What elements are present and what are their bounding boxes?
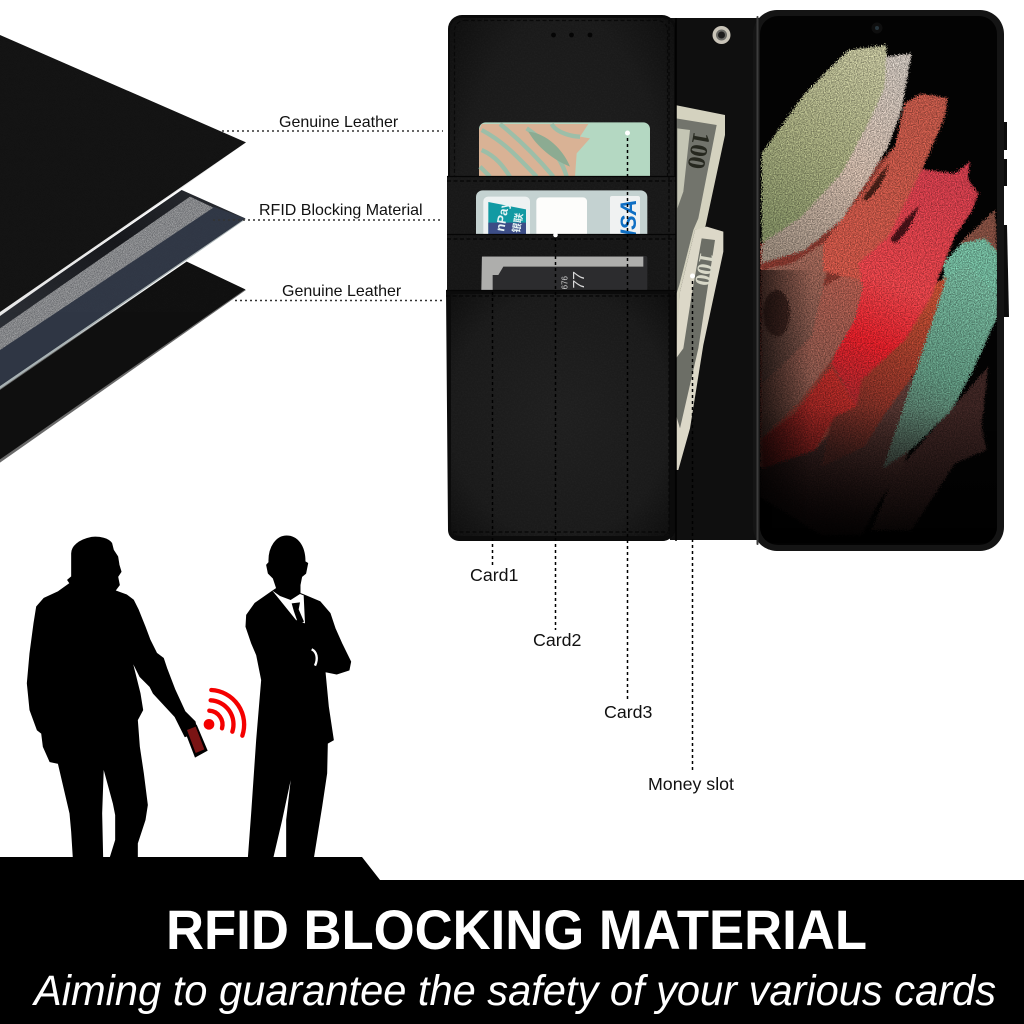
callout: Card1: Card1 <box>470 565 519 585</box>
callout: Card2 <box>533 233 581 650</box>
silhouette: man with reader <box>27 537 197 858</box>
snap dots <box>551 33 592 37</box>
card 3 black card: 77 <box>571 272 588 289</box>
front camera <box>872 22 882 34</box>
banner <box>0 857 1024 1024</box>
phone case body <box>753 10 1004 551</box>
card 2 bank card: VISA <box>616 199 641 251</box>
silhouette: businessman <box>246 536 351 858</box>
banknote upper <box>675 105 725 352</box>
layer: top genuine leather <box>0 35 246 316</box>
banknote upper: 100 <box>682 130 715 171</box>
layer: bottom genuine leather <box>0 262 246 463</box>
wallet case <box>446 15 760 541</box>
layered material diagram <box>0 35 246 463</box>
leather front panel <box>448 15 676 541</box>
banknote lower: 100 <box>690 251 720 288</box>
pocket 1 <box>447 176 676 236</box>
pocket 2 <box>447 234 676 292</box>
grommet <box>712 26 730 44</box>
side buttons <box>1003 122 1009 317</box>
card 1 green marble <box>479 122 650 177</box>
phone <box>753 10 1009 551</box>
callout: Money slot <box>648 274 734 794</box>
layer labels <box>213 114 443 300</box>
inner flap with money slot <box>670 18 760 540</box>
subheading: Aiming to guarantee the safety of your various cards <box>31 967 996 1015</box>
callout: Card3 <box>604 130 653 722</box>
case highlight <box>756 16 758 545</box>
card 3 black card <box>481 256 647 291</box>
RFID theft scene <box>27 536 351 858</box>
card 2 bank card: 银联 <box>509 212 526 234</box>
card 2 bank card: nPay <box>493 200 512 233</box>
label: top genuine leather: Genuine Leather <box>279 114 399 131</box>
underlay closes gaps between petals <box>760 147 955 468</box>
icon: wireless signal <box>204 690 244 736</box>
label: RFID blocking material: RFID Blocking Material <box>259 202 423 219</box>
banner background <box>0 857 1024 1024</box>
card 3 black card: 676 <box>560 275 569 289</box>
callout: Money slot: Money slot <box>648 774 734 794</box>
heading: RFID BLOCKING MATERIAL <box>166 898 867 961</box>
layer: RFID blocking material <box>0 190 246 389</box>
phone screen <box>760 16 997 545</box>
callout: Card3: Card3 <box>604 702 653 722</box>
pocket 3 front <box>446 18 676 541</box>
card and money slot callouts <box>470 130 734 794</box>
reader device <box>184 725 208 758</box>
label: bottom genuine leather: Genuine Leather <box>282 283 402 300</box>
callout: Card2: Card2 <box>533 630 581 650</box>
banknote lower <box>676 227 723 470</box>
card 2 bank card <box>476 190 648 234</box>
wallpaper artwork <box>758 45 1002 543</box>
